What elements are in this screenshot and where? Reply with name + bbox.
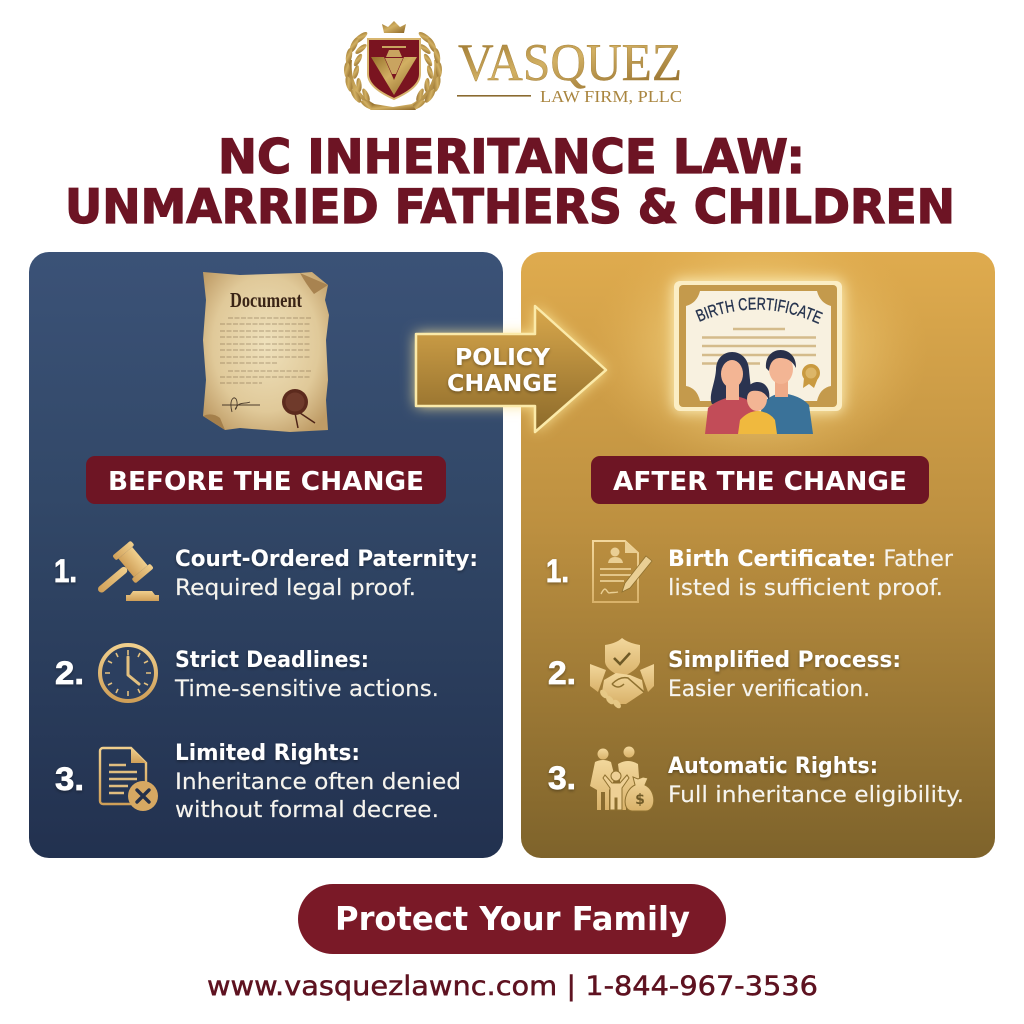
item 1 text: Birth Certificate: Father	[668, 547, 954, 572]
item 1: court-ordered paternity: Required legal proof.	[175, 576, 416, 601]
title: UNMARRIED FATHERS & CHILDREN	[65, 180, 955, 235]
contact line: www.vasquezlawnc.com | 1-844-967-3536	[207, 971, 818, 1002]
logo divider	[457, 95, 531, 97]
icon: shield	[368, 39, 420, 99]
icon: family and money bag	[590, 746, 654, 811]
item 3: limited rights: Inheritance often denied	[175, 770, 461, 795]
item 2: simplified process	[548, 638, 901, 710]
item 1 text: Court-Ordered Paternity:	[175, 547, 478, 572]
number 1: 1.	[546, 553, 569, 589]
panel: before the change	[29, 252, 503, 858]
icon: laurel wreath	[344, 30, 442, 112]
item 3 text: Automatic Rights:	[668, 754, 878, 779]
badge: before the change	[86, 456, 446, 504]
document body lines	[220, 318, 311, 383]
item 3: automatic rights: Full inheritance eligibility.	[668, 783, 964, 808]
panel background	[29, 252, 503, 858]
item 2: simplified process: Easier verification.	[668, 677, 870, 702]
icon: gavel	[87, 540, 159, 605]
item 3: limited rights: without formal decree.	[175, 798, 439, 823]
panel: after the change	[521, 252, 995, 858]
document heading: Document	[230, 288, 302, 312]
badge: before the change: BEFORE THE CHANGE	[108, 467, 424, 497]
arrow label	[447, 345, 558, 397]
logo subtitle: LAW FIRM, PLLC	[540, 87, 682, 106]
item 2 text: Simplified Process:	[668, 648, 901, 673]
signature	[222, 398, 260, 412]
item 2 text: Strict Deadlines:	[175, 648, 369, 673]
arrow label: POLICY	[455, 345, 550, 371]
dollar sign: $	[635, 792, 645, 808]
logo wordmark: VASQUEZ	[458, 34, 682, 92]
icon: aged document	[203, 272, 329, 432]
icon: signed document with pen	[593, 541, 652, 602]
item 2: strict deadlines	[55, 645, 439, 702]
number 2: 2.	[55, 655, 84, 691]
panel background	[521, 252, 995, 858]
title: NC INHERITANCE LAW:	[218, 130, 805, 185]
logo: Vasquez Law Firm	[344, 21, 682, 112]
badge: after the change	[591, 456, 929, 504]
child	[738, 382, 777, 434]
item 1: court-ordered paternity	[54, 540, 478, 605]
item 2: strict deadlines: Time-sensitive actions.	[174, 677, 439, 702]
wax seal	[282, 389, 315, 428]
icon: document with x	[100, 748, 158, 811]
icon: clock	[100, 645, 156, 701]
icon: crown	[382, 21, 406, 33]
item 3: limited rights	[55, 741, 461, 823]
arrow: policy change	[416, 306, 606, 432]
arrow label: CHANGE	[447, 371, 558, 397]
number 1: 1.	[54, 553, 77, 589]
icon: birth certificate with family	[664, 271, 852, 434]
call to action button: Protect Your Family	[335, 899, 690, 938]
certificate halo	[626, 252, 890, 456]
item 3 text: Limited Rights:	[175, 741, 360, 766]
badge: after the change: AFTER THE CHANGE	[613, 467, 907, 497]
mother	[705, 352, 760, 434]
item 3: automatic rights	[548, 746, 964, 811]
call to action button	[298, 884, 726, 954]
number 3: 3.	[548, 760, 576, 796]
number 3: 3.	[55, 761, 84, 797]
certificate heading: BIRTH CERTIFICATE	[695, 298, 823, 324]
father	[758, 350, 813, 434]
number 2: 2.	[548, 655, 576, 691]
title	[65, 130, 955, 235]
item 1: birth certificate	[546, 541, 954, 602]
ribbon seal	[802, 364, 820, 388]
item 1: birth certificate: listed is sufficient proof.	[668, 576, 943, 601]
certificate lines	[702, 329, 816, 364]
icon: shield and handshake	[590, 638, 654, 710]
